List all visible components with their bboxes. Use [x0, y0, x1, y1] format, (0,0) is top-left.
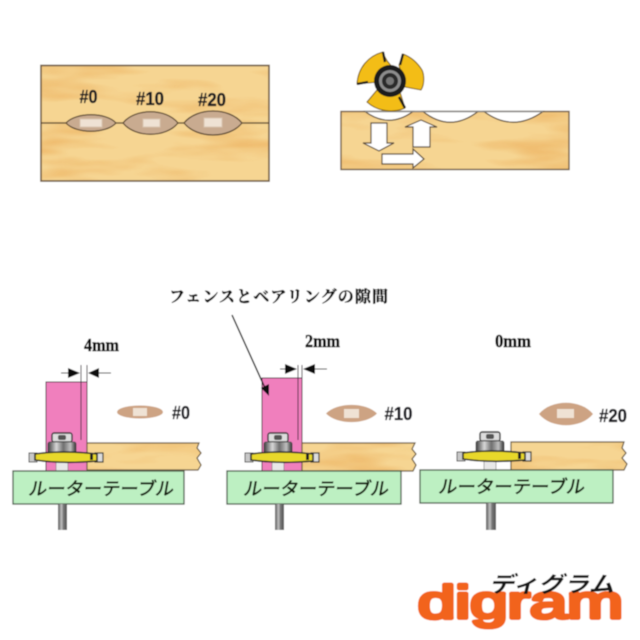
arrow: callout pointer [232, 315, 269, 396]
wood board with slots [341, 112, 569, 170]
logo: digram [418, 571, 623, 628]
spindle [58, 504, 67, 530]
router table [13, 471, 184, 504]
workpiece [511, 442, 627, 470]
panel: slot cutting diagram [341, 52, 569, 170]
spindle [275, 504, 284, 530]
panel: 2mm setup [227, 315, 416, 530]
gap dimension [61, 365, 111, 440]
label #0: #0 [80, 87, 98, 107]
panel: 0mm setup [420, 331, 627, 530]
logo wordmark: digram [418, 576, 623, 628]
workpiece [87, 443, 201, 470]
arrow: right [382, 149, 424, 168]
table label: ルーターテーブル [27, 478, 176, 499]
biscuit #10 [326, 405, 377, 422]
panel: wood joint with biscuits [41, 66, 269, 181]
label #10: #10 [136, 89, 164, 109]
biscuit #20 [184, 111, 242, 135]
spindle [486, 503, 496, 530]
logo katakana: ディグラム [488, 571, 619, 597]
heading: 0mm: 0mm [495, 331, 531, 351]
biscuit #20 [539, 403, 593, 425]
router bit [457, 432, 531, 470]
gap dimension [280, 364, 327, 440]
table label: ルーターテーブル [437, 476, 587, 497]
router table [227, 471, 401, 504]
label #20: #20 [198, 90, 226, 110]
heading: 2mm: 2mm [305, 331, 340, 351]
biscuit #0 [66, 115, 116, 131]
arrow: down [363, 123, 394, 151]
workpiece [302, 443, 416, 471]
joint seam [41, 122, 269, 124]
router bit [29, 433, 103, 471]
fence [46, 382, 87, 471]
callout: fence and bearing gap: フェンスとベアリングの隙間 [169, 288, 388, 306]
wood board [41, 66, 269, 181]
router bit [245, 433, 319, 471]
panel: 4mm setup [13, 335, 201, 530]
label #10: #10 [384, 404, 412, 424]
biscuit #0 [117, 406, 163, 418]
icon: three-wing slot cutter [357, 52, 424, 111]
heading: 4mm: 4mm [84, 335, 119, 355]
table label: ルーターテーブル [242, 478, 391, 499]
arrow: up [405, 120, 437, 147]
cut slots [365, 112, 543, 122]
label #0: #0 [172, 403, 190, 423]
biscuit #10 [123, 112, 178, 134]
fence [262, 378, 302, 471]
label #20: #20 [599, 406, 627, 426]
router table [420, 470, 613, 503]
board top edge [365, 110, 543, 112]
